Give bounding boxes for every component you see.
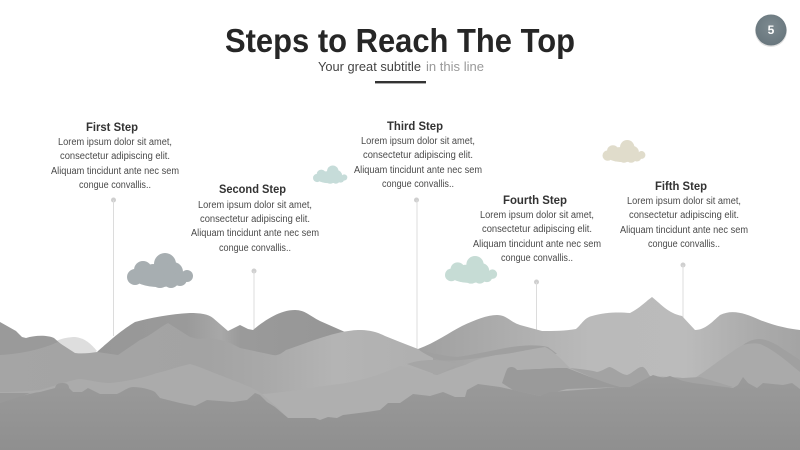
- dark swoop under ridge: [419, 345, 557, 361]
- step 1: Lorem ipsum dolor sit amet,: [58, 137, 172, 148]
- dark band on right slope: [743, 339, 800, 372]
- far ridge behind centre: [97, 310, 345, 370]
- right far ridge: [418, 297, 800, 410]
- step 1: Aliquam tincidunt ante nec sem: [51, 166, 179, 177]
- page number badge: [755, 14, 787, 47]
- step 2: consectetur adipiscing elit.: [200, 214, 310, 225]
- step 4: Lorem ipsum dolor sit amet,: [480, 210, 594, 221]
- step 2: [191, 182, 319, 254]
- title: Steps to Reach The Top: [225, 22, 575, 59]
- cloud: small teal: [313, 166, 347, 184]
- step 3: Lorem ipsum dolor sit amet,: [361, 136, 475, 147]
- step 5: consectetur adipiscing elit.: [629, 210, 739, 221]
- left and centre middle ridge: [0, 323, 433, 425]
- distant rock ridge, right: [570, 367, 733, 395]
- step 1: consectetur adipiscing elit.: [60, 151, 170, 162]
- step 3: [354, 119, 482, 190]
- cloud: large teal: [445, 256, 497, 284]
- right inner slope: [680, 343, 800, 400]
- step 3: congue convallis..: [382, 179, 454, 190]
- cloud: grey: [127, 253, 193, 288]
- page number badge: 5: [768, 23, 775, 37]
- title underline: [375, 81, 426, 83]
- dark rock band, left: [0, 393, 30, 405]
- step 4: congue convallis..: [501, 253, 573, 264]
- step 5: Lorem ipsum dolor sit amet,: [627, 196, 741, 207]
- lower light layer centre: [262, 347, 640, 425]
- step 5: Fifth Step: [655, 179, 707, 193]
- lower light layer left: [0, 364, 295, 425]
- step 5: congue convallis..: [648, 239, 720, 250]
- dark rock band, centre: [502, 367, 620, 396]
- step 1: [51, 120, 179, 191]
- step 1: congue convallis..: [79, 180, 151, 191]
- front foreground: [0, 375, 800, 450]
- step 4: Fourth Step: [503, 193, 567, 207]
- step 1: First Step: [86, 120, 138, 134]
- mountain range: [0, 297, 800, 450]
- step 3: Aliquam tincidunt ante nec sem: [354, 165, 482, 176]
- subtitle: [318, 59, 484, 74]
- step 2: Second Step: [219, 182, 286, 196]
- subtitle: Your great subtitle: [318, 59, 421, 74]
- step 4: Aliquam tincidunt ante nec sem: [473, 239, 601, 250]
- subtitle: in this line: [426, 59, 484, 74]
- step 4: [473, 193, 601, 264]
- step 5: Aliquam tincidunt ante nec sem: [620, 225, 748, 236]
- step 3: Third Step: [387, 119, 443, 133]
- far left ridge: [0, 322, 62, 365]
- step 3: consectetur adipiscing elit.: [363, 150, 473, 161]
- step 2: congue convallis..: [219, 243, 291, 254]
- step 5: [620, 179, 748, 250]
- pale distant hump: [56, 337, 97, 362]
- step 4: consectetur adipiscing elit.: [482, 224, 592, 235]
- small dark patch: [407, 360, 458, 375]
- step 2: Aliquam tincidunt ante nec sem: [191, 228, 319, 239]
- pin lines: [111, 198, 686, 350]
- cloud: beige: [602, 140, 645, 163]
- step 2: Lorem ipsum dolor sit amet,: [198, 200, 312, 211]
